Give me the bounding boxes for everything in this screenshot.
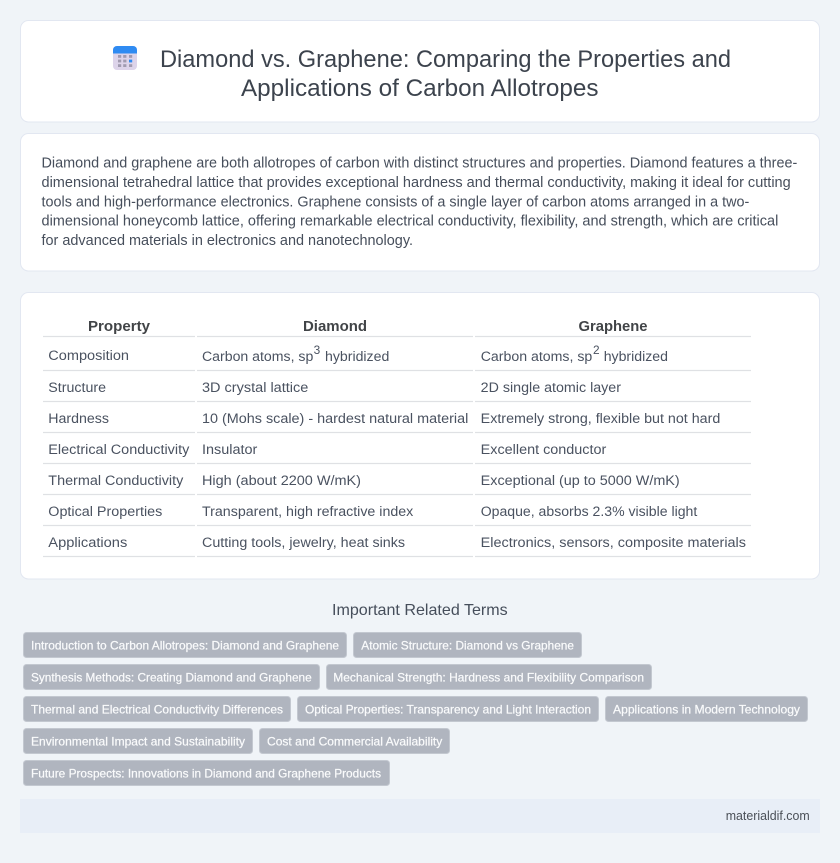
intro paragraph: tools and high-performance electronics. Graphene consists of a single layer of carbon atoms arranged in a two- — [42, 194, 750, 210]
row: optical properties — [48, 504, 697, 520]
row: electrical conductivity — [48, 442, 607, 458]
tag: Mechanical Strength: Hardness and Flexibility Comparison — [333, 670, 644, 684]
tag: Future Prospects: Innovations in Diamond and Graphene Products — [31, 766, 381, 780]
row: applications — [48, 535, 746, 551]
row: hardness — [48, 411, 720, 427]
row: structure — [48, 380, 621, 396]
intro paragraph: dimensional honeycomb lattice, offering remarkable electrical conductivity, flexibility, and strength, which are critical — [42, 214, 778, 230]
row: optical properties: Opaque, absorbs 2.3% visible light — [481, 504, 697, 520]
tag: Thermal and Electrical Conductivity Differences — [31, 702, 283, 716]
row: composition — [48, 345, 668, 365]
row: electrical conductivity: Insulator — [202, 442, 258, 458]
row: structure: 2D single atomic layer — [481, 380, 621, 396]
footer: materialdif.com — [726, 808, 810, 823]
row: thermal conductivity: Thermal Conductivity — [48, 473, 184, 489]
row: structure: 3D crystal lattice — [202, 380, 308, 396]
row: electrical conductivity: Excellent conductor — [481, 442, 607, 458]
tag: Introduction to Carbon Allotropes: Diamond and Graphene — [31, 638, 339, 652]
row: composition: hybridized — [604, 349, 668, 365]
row: composition: 2 — [593, 345, 600, 357]
tag: Environmental Impact and Sustainability — [31, 734, 245, 748]
row: composition: Composition — [48, 348, 129, 364]
panel: introduction — [20, 134, 820, 271]
tag — [24, 632, 346, 658]
tag — [326, 664, 652, 690]
row: applications: Applications — [48, 535, 127, 551]
row: hardness: 10 (Mohs scale) - hardest natural material — [202, 411, 468, 427]
tag — [354, 632, 582, 658]
row: composition: Carbon atoms, sp — [481, 349, 592, 365]
title: Diamond vs. Graphene: Comparing the Properties and — [160, 46, 731, 73]
table header — [88, 319, 648, 335]
table header: Diamond — [303, 319, 367, 335]
row: optical properties: Optical Properties — [48, 504, 162, 520]
row: hardness: Extremely strong, flexible but not hard — [481, 411, 720, 427]
row: composition: Carbon atoms, sp — [202, 349, 313, 365]
tag — [24, 664, 320, 690]
panel: header — [20, 20, 820, 122]
row: optical properties: Transparent, high refractive index — [202, 504, 413, 520]
row: applications: Electronics, sensors, composite materials — [481, 535, 746, 551]
row: thermal conductivity — [48, 473, 680, 489]
row: hardness: Hardness — [48, 411, 109, 427]
tag: Atomic Structure: Diamond vs Graphene — [361, 638, 574, 652]
tag: Synthesis Methods: Creating Diamond and Graphene — [31, 670, 312, 684]
row: composition: hybridized — [325, 349, 389, 365]
row: thermal conductivity: High (about 2200 W/mK) — [202, 473, 361, 489]
row: electrical conductivity: Electrical Conductivity — [48, 442, 190, 458]
tag — [24, 728, 252, 754]
tag — [606, 696, 808, 722]
table header: Property — [88, 319, 150, 335]
intro paragraph: Diamond and graphene are both allotropes of carbon with distinct structures and properties. Diamond features a three- — [42, 156, 798, 172]
heading: important related terms: Important Related Terms — [332, 602, 508, 619]
table header: Graphene — [578, 319, 648, 335]
tag group: related terms — [24, 632, 808, 786]
title: Applications of Carbon Allotropes — [241, 75, 598, 102]
tag — [260, 728, 450, 754]
intro paragraph — [42, 156, 798, 249]
panel: comparison table — [20, 292, 820, 579]
title — [160, 46, 731, 102]
intro paragraph: dimensional tetrahedral lattice that provides exceptional hardness and thermal conductivity, making it ideal for cutting — [42, 175, 791, 191]
tag — [24, 696, 290, 722]
tag: Optical Properties: Transparency and Light Interaction — [305, 702, 591, 716]
row: thermal conductivity: Exceptional (up to 5000 W/mK) — [481, 473, 680, 489]
row: structure: Structure — [48, 380, 106, 396]
icon: calendar — [113, 46, 137, 70]
row: applications: Cutting tools, jewelry, heat sinks — [202, 535, 405, 551]
tag — [24, 760, 390, 786]
intro paragraph: for advanced materials in electronics and nanotechnology. — [42, 233, 413, 249]
tag: Cost and Commercial Availability — [267, 734, 442, 748]
tag: Applications in Modern Technology — [613, 702, 800, 716]
tag — [298, 696, 598, 722]
row: composition: 3 — [314, 345, 320, 357]
footer — [20, 799, 820, 833]
